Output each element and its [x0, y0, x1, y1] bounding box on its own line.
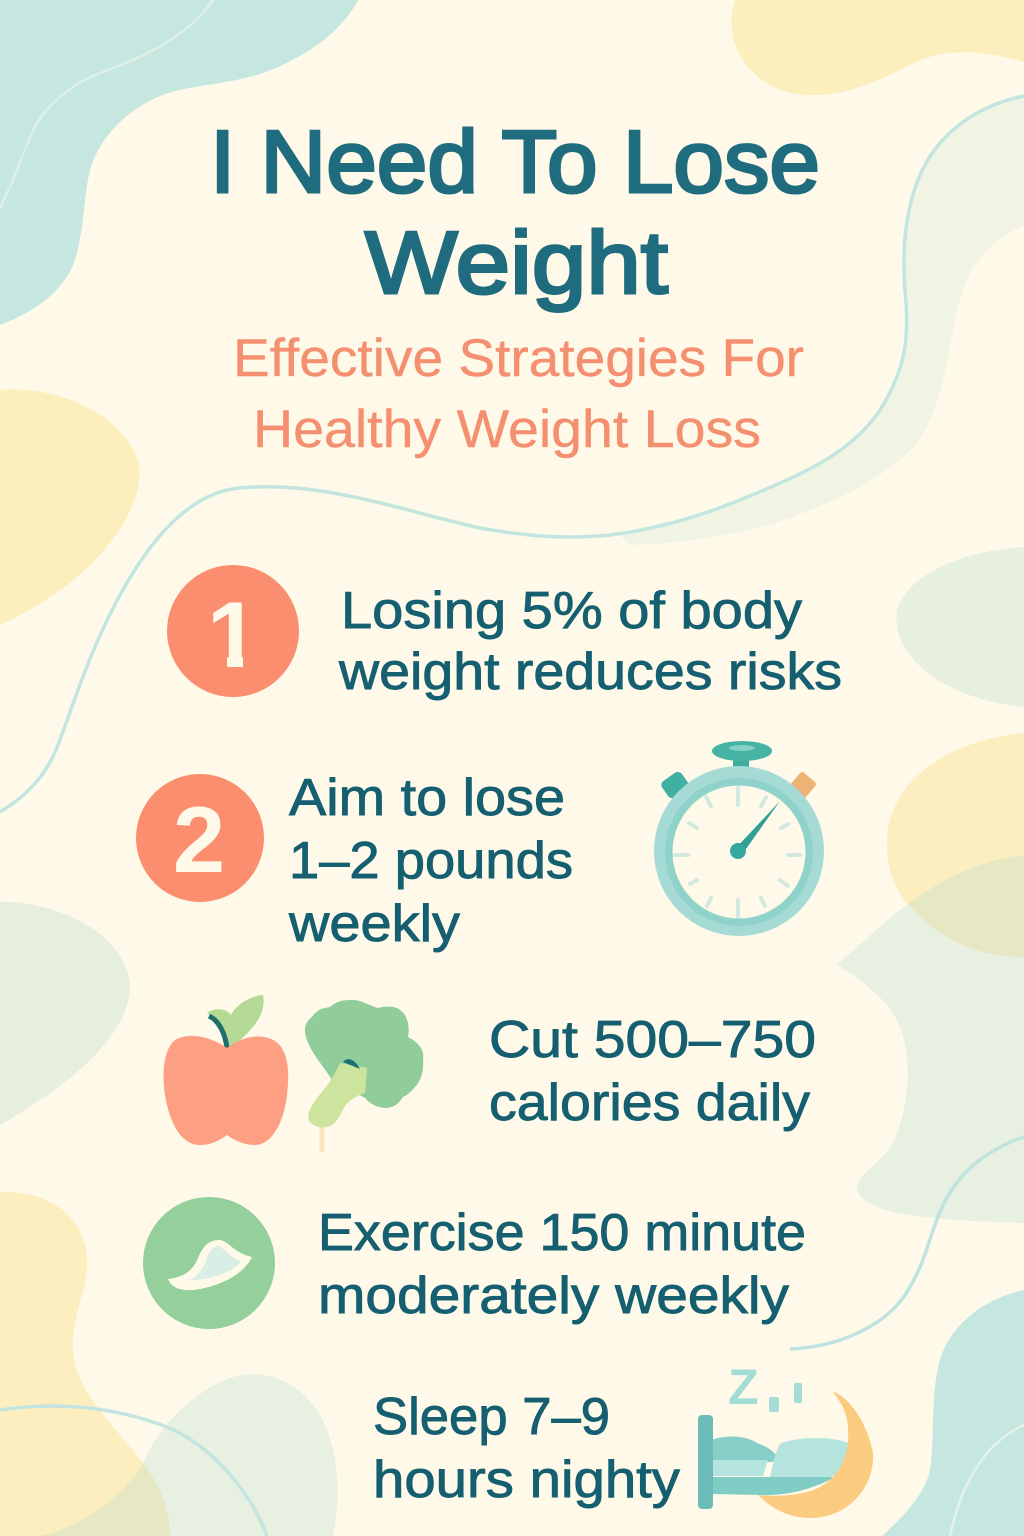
subtitle: Healthy Weight Loss: [253, 400, 761, 459]
text: item 2: weekly: [288, 895, 460, 953]
icon: stopwatch: [654, 741, 824, 936]
text: item 2: [288, 769, 573, 953]
icon: moon and bed: Z: [728, 1359, 759, 1415]
title: Weight: [365, 213, 668, 312]
panel: item 5 sleep: [373, 1359, 873, 1518]
panel: item 2 weekly loss: [136, 741, 824, 953]
text: item 5: hours nighty: [373, 1451, 680, 1509]
subtitle: [233, 329, 804, 459]
text: item 5: [373, 1388, 680, 1509]
text: item 1: Losing 5% of body: [341, 582, 802, 640]
icon: exercise badge: [143, 1197, 275, 1329]
icon: number 2 badge: 2: [173, 787, 225, 892]
text: item 4: [318, 1204, 806, 1325]
text: item 1: [338, 582, 842, 701]
icon: number 1 badge: 1: [207, 582, 259, 687]
panel: item 3 calories: [164, 995, 816, 1152]
panel: item 4 exercise: [143, 1197, 806, 1329]
text: item 3: calories daily: [489, 1074, 810, 1132]
text: item 2: 1–2 pounds: [289, 832, 573, 890]
text: item 2: Aim to lose: [289, 769, 565, 827]
text: item 5: Sleep 7–9: [373, 1388, 610, 1446]
text: item 1: weight reduces risks: [338, 643, 842, 701]
text: item 4: Exercise 150 minute: [318, 1204, 806, 1262]
panel: item 1 body weight: [167, 565, 842, 701]
icon: number 1 badge: [167, 565, 299, 697]
icon: broccoli: [305, 1000, 423, 1152]
icon: number 2 badge: [136, 774, 264, 902]
subtitle: Effective Strategies For: [233, 329, 804, 388]
title: [210, 112, 820, 312]
icon: apple: [164, 995, 288, 1145]
text: item 4: moderately weekly: [318, 1267, 789, 1325]
text: item 3: [489, 1011, 816, 1132]
text: item 3: Cut 500–750: [489, 1011, 816, 1069]
title: I Need To Lose: [210, 112, 820, 211]
icon: moon and bed: [698, 1359, 873, 1518]
